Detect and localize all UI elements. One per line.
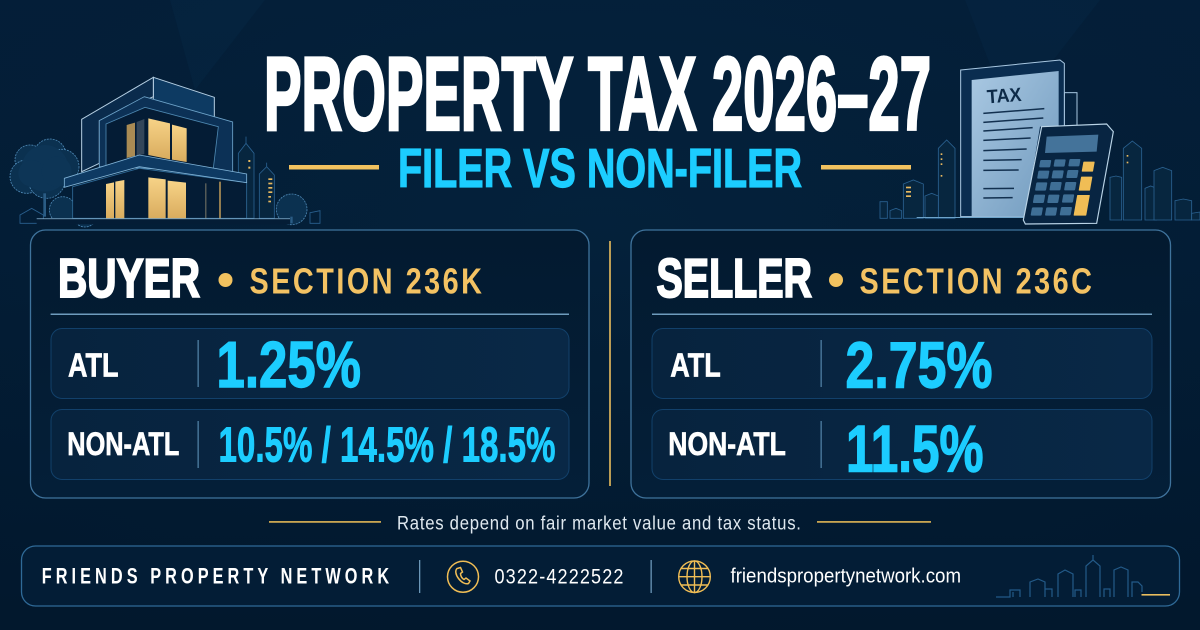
footnote: Rates depend on fair market value and tax status. <box>397 512 801 534</box>
buyer ATL row <box>51 328 569 401</box>
bullet <box>829 273 843 287</box>
seller non-ATL row <box>652 410 1152 485</box>
tax label: TAX <box>986 85 1022 108</box>
calculator <box>1023 124 1113 224</box>
buyer ATL row: 1.25% <box>216 329 361 401</box>
buyer heading: BUYER <box>58 247 200 309</box>
icon: phone <box>448 561 478 592</box>
seller ATL row <box>652 328 1152 402</box>
seller ATL row: ATL <box>670 348 721 384</box>
website: friendspropertynetwork.com <box>730 565 961 588</box>
buyer section label: SECTION 236K <box>250 260 482 301</box>
buyer ATL row: ATL <box>68 348 118 384</box>
icon: skyline <box>996 555 1170 597</box>
illustration: tax document and calculator with skyline <box>880 60 1200 224</box>
center divider <box>609 241 611 486</box>
brand name: FRIENDS PROPERTY NETWORK <box>42 564 389 589</box>
seller ATL row: 2.75% <box>846 330 992 402</box>
icon: globe <box>679 561 710 592</box>
seller section label: SECTION 236C <box>860 260 1092 301</box>
seller non-ATL row: NON-ATL <box>668 426 786 462</box>
buyer non-ATL row <box>51 410 569 480</box>
subtitle: filer vs non-filer: FILER VS NON-FILER <box>398 137 802 199</box>
seller heading: SELLER <box>656 247 812 309</box>
seller non-ATL row: 11.5% <box>846 412 984 485</box>
panel: seller section 236C <box>631 230 1170 498</box>
footer bar <box>22 546 1180 606</box>
buyer non-ATL row: NON-ATL <box>67 426 179 462</box>
phone number: 0322-4222522 <box>494 565 623 589</box>
bullet <box>218 273 232 287</box>
buyer non-ATL row: 10.5% / 14.5% / 18.5% <box>218 417 556 472</box>
illustration: modern house with trees <box>10 77 320 227</box>
panel: buyer section 236K <box>30 230 589 498</box>
